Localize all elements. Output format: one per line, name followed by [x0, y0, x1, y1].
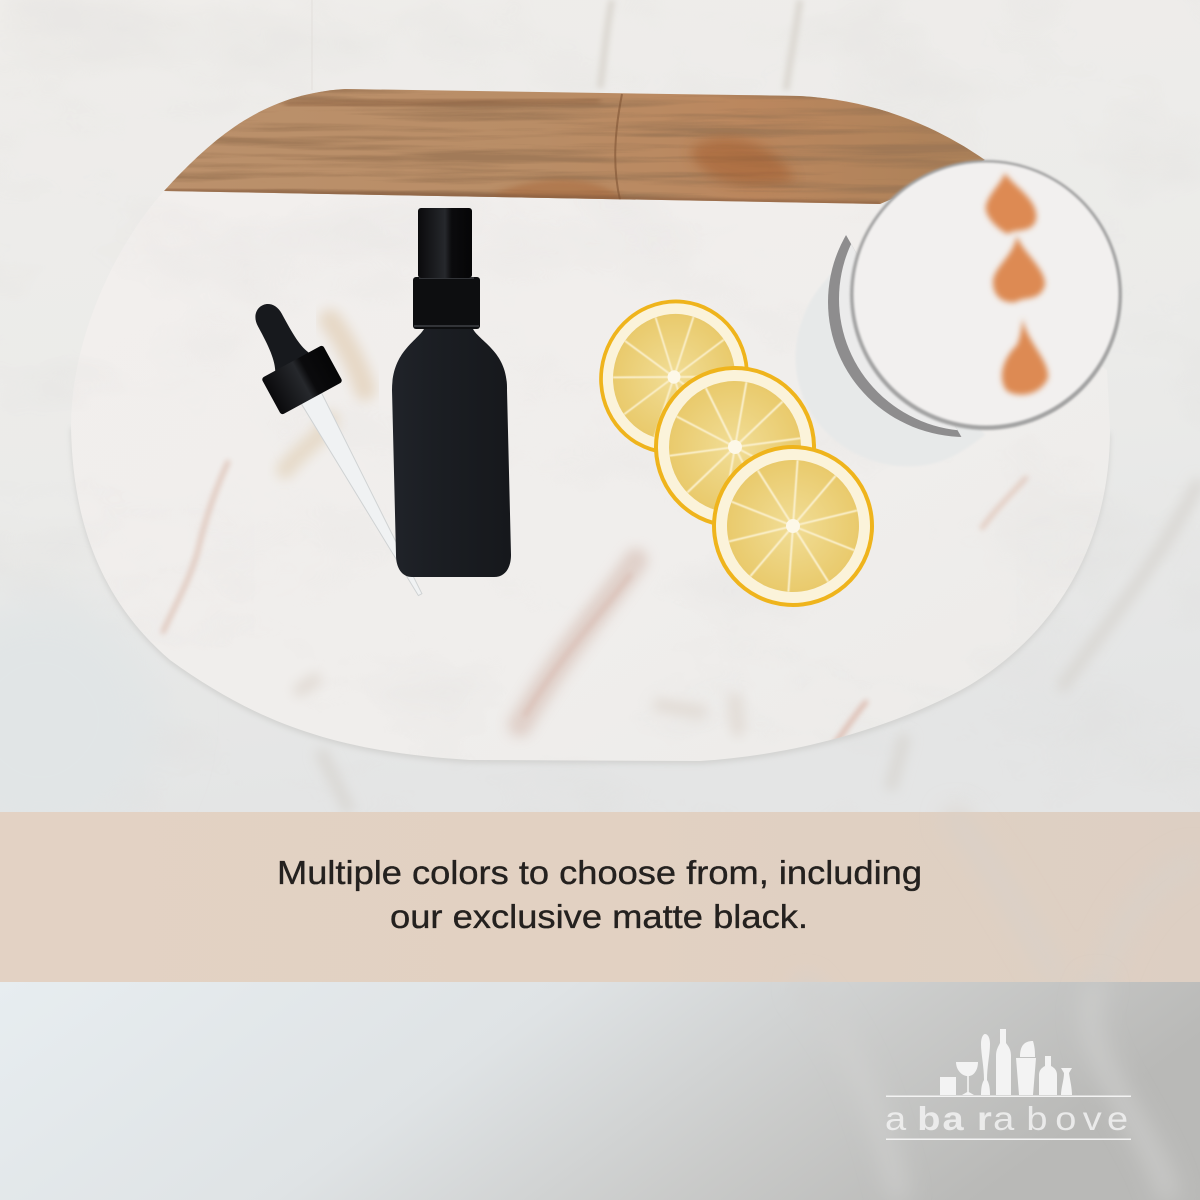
wood section	[164, 89, 985, 204]
rubber bulb	[244, 296, 310, 373]
lemon slices	[579, 280, 879, 612]
bottle body	[392, 329, 511, 577]
dropper	[231, 289, 450, 612]
marble board section	[71, 191, 1110, 761]
marble veins and mottling	[158, 306, 1030, 740]
glass pipette	[301, 392, 429, 601]
logo wordmark: a barabove	[885, 1100, 1128, 1137]
lemon slice 3	[707, 440, 879, 612]
glass dark band	[828, 235, 962, 437]
ribbed collar	[413, 277, 480, 329]
glass base	[796, 268, 985, 466]
glossy cap	[261, 345, 343, 415]
logo icons: barware silhouettes	[940, 1029, 1072, 1095]
lemon slice 1	[579, 280, 769, 474]
glass rim	[850, 160, 1122, 430]
cutting board shadow	[71, 428, 1110, 764]
matte black bottle	[392, 208, 511, 577]
logo bottom rule	[886, 1138, 1131, 1140]
lower marble background	[0, 982, 1200, 1200]
marble background	[0, 0, 1200, 840]
foam surface	[854, 162, 1118, 426]
logo top rule	[886, 1096, 1131, 1097]
cocktail glass with foam and bitters	[796, 160, 1122, 466]
bitters drops	[986, 173, 1048, 395]
spray cap	[418, 208, 472, 278]
logo: a bar above	[885, 1029, 1131, 1140]
lemon slice 2	[641, 353, 829, 541]
caption band	[0, 812, 1200, 982]
marble and wood cutting board	[60, 80, 1120, 770]
caption text: our exclusive matte black.	[390, 898, 808, 935]
caption text: Multiple colors to choose from, including	[277, 854, 922, 891]
collar highlights	[414, 278, 479, 326]
